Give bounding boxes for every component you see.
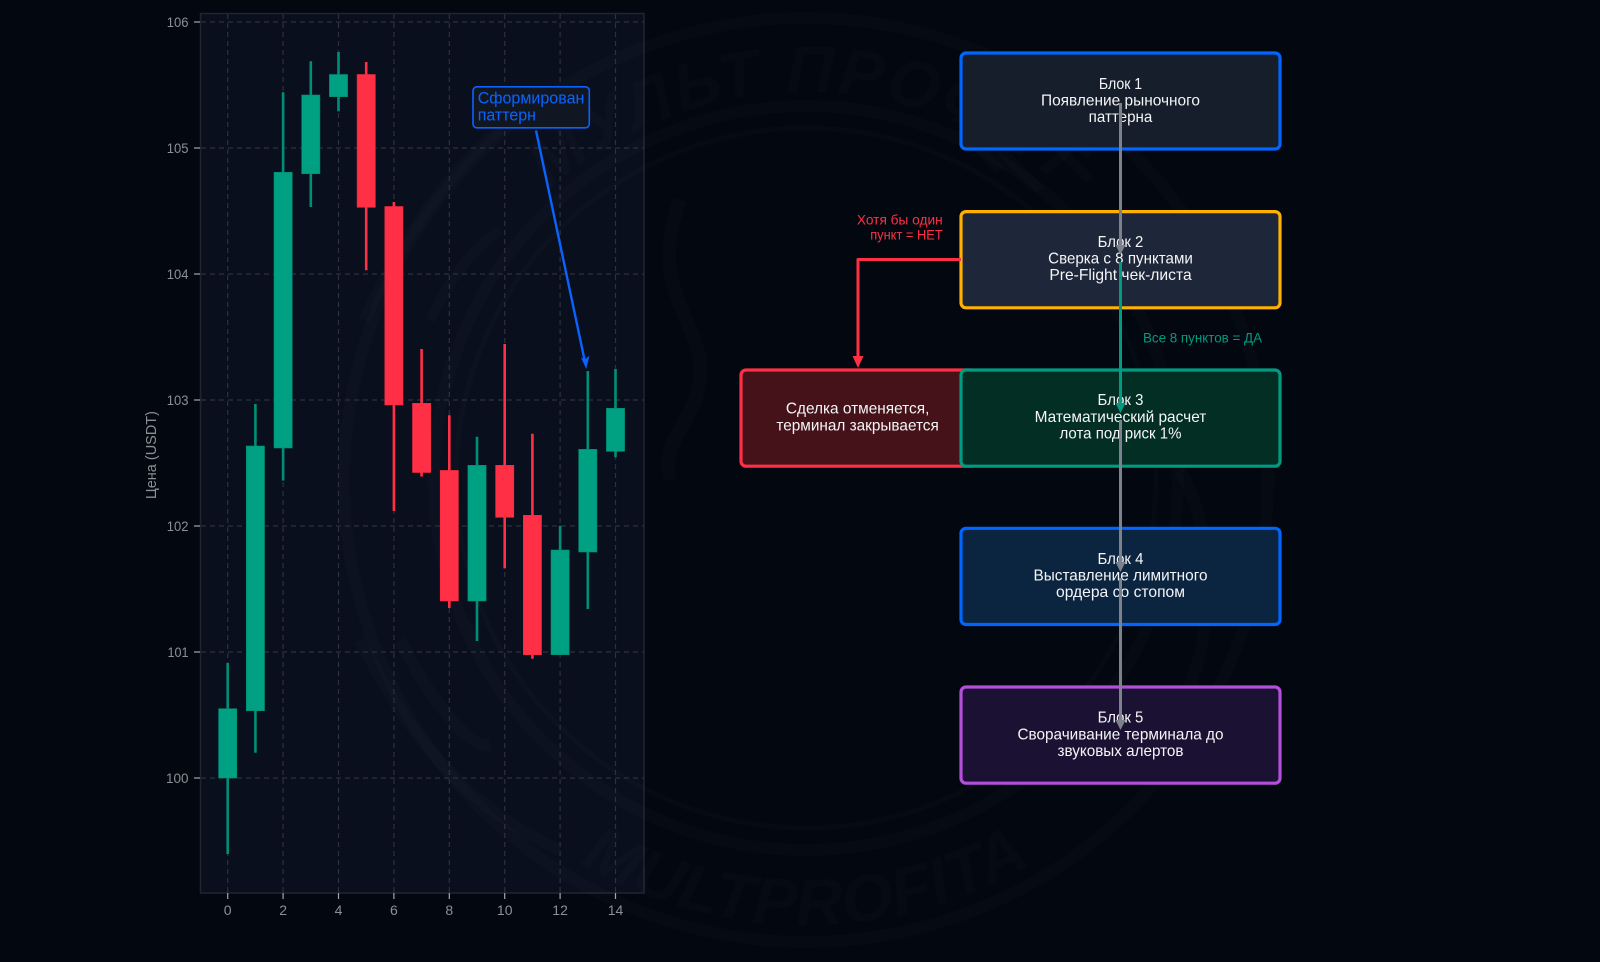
x axis with index labels <box>224 893 623 918</box>
block 4: Блок 4 <box>1098 551 1144 568</box>
callout: pattern formed: Сформирован <box>478 90 584 108</box>
watermark logo: MULTPROFITA <box>573 811 1039 940</box>
block 3: лота под риск 1% <box>1060 426 1182 442</box>
block 1: Блок 1 <box>1099 76 1142 93</box>
block 1: паттерна <box>1089 109 1152 126</box>
y axis with price labels: 104 <box>167 266 189 282</box>
block 2: Блок 2 <box>1098 234 1143 251</box>
arrow: block 2 to cancelled trade <box>852 260 961 368</box>
y axis with price labels: 106 <box>167 14 189 30</box>
x axis with index labels: 8 <box>445 902 453 918</box>
arrow: block 2 to block 3 <box>1116 262 1126 413</box>
y axis title: Цена (USDT) <box>144 411 160 499</box>
block 3 <box>961 370 1280 466</box>
block 1: Появление рыночного <box>1041 93 1200 110</box>
block 5: звуковых алертов <box>1058 743 1184 760</box>
y axis with price labels: 100 <box>166 770 189 786</box>
block 4: ордера со стопом <box>1056 584 1185 601</box>
candle 3 <box>302 61 320 207</box>
block 2: Сверка с 8 пунктами <box>1048 251 1193 268</box>
block 2 <box>961 212 1280 308</box>
y axis with price labels <box>166 14 200 786</box>
y axis with price labels: 103 <box>167 392 189 408</box>
arrow: block 4 to block 5 <box>1116 578 1126 730</box>
candlestick series <box>219 52 625 854</box>
block 5 <box>961 687 1280 783</box>
arrow: callout to candle 13 <box>536 130 590 369</box>
x axis with index labels: 14 <box>608 902 623 918</box>
arrow: block 3 to block 4 <box>1116 420 1126 572</box>
watermark logo <box>344 18 1268 942</box>
y axis with price labels: 101 <box>168 644 189 660</box>
candle 7 <box>412 349 431 476</box>
x axis with index labels: 10 <box>497 902 513 918</box>
candle 13 <box>579 371 597 609</box>
chart panel <box>200 14 644 893</box>
candle 0 <box>219 663 237 854</box>
candle 11 <box>523 434 542 659</box>
candle 4 <box>329 52 348 111</box>
x axis with index labels: 4 <box>335 902 343 918</box>
cancelled trade box <box>741 370 975 466</box>
block 5: Сворачивание терминала до <box>1018 726 1224 743</box>
block 4: Выставление лимитного <box>1034 568 1208 585</box>
candle 2 <box>274 92 292 481</box>
callout: pattern formed: паттерн <box>478 107 536 125</box>
x axis with index labels: 12 <box>552 902 568 918</box>
block 1 <box>961 53 1280 149</box>
x axis with index labels: 2 <box>279 902 287 918</box>
candle 14 <box>606 369 625 457</box>
x axis with index labels: 6 <box>390 902 398 918</box>
cancelled trade box: Сделка отменяется, <box>786 400 929 418</box>
candle 1 <box>246 404 264 753</box>
chart grid <box>201 14 644 893</box>
watermark logo: МУЛЬТ ПРОФИТ <box>512 32 1102 201</box>
block 3: Блок 3 <box>1098 392 1144 409</box>
block 2: Pre-Flight чек-листа <box>1049 267 1192 284</box>
y axis with price labels: 105 <box>167 140 189 156</box>
label: no branch: пункт = НЕТ <box>870 228 943 242</box>
label: yes branch: Все 8 пунктов = ДА <box>1143 331 1262 346</box>
cancelled trade box: терминал закрывается <box>776 417 939 434</box>
label: no branch <box>857 213 943 242</box>
candle 8 <box>440 415 458 608</box>
candle 9 <box>468 437 486 641</box>
block 5: Блок 5 <box>1098 710 1143 727</box>
label: no branch: Хотя бы один <box>857 213 943 228</box>
candle 12 <box>551 526 569 655</box>
candle 10 <box>496 344 514 568</box>
callout: pattern formed <box>473 87 589 128</box>
x axis with index labels: 0 <box>224 902 232 918</box>
candle 5 <box>357 62 375 270</box>
arrow: block 1 to block 2 <box>1116 103 1126 254</box>
candle 6 <box>385 202 403 511</box>
block 4 <box>961 528 1280 624</box>
block 3: Математический расчет <box>1035 409 1207 426</box>
y axis with price labels: 102 <box>167 518 189 534</box>
